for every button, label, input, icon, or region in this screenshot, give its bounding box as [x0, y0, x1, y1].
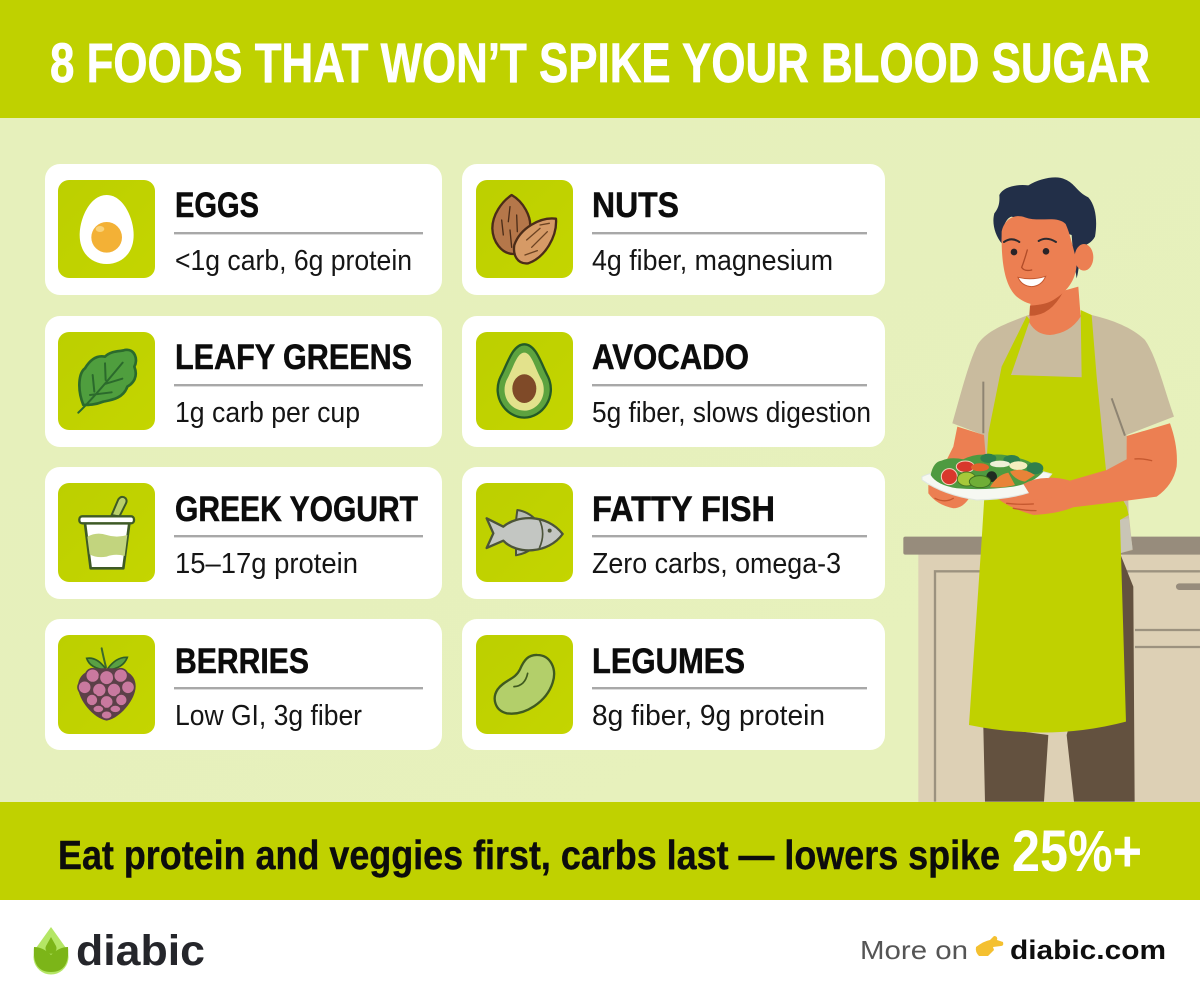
text: berries detail: Low GI, 3g fiber	[175, 700, 362, 732]
logo: drop icon	[33, 927, 68, 975]
callout band	[0, 802, 1200, 900]
heading: legumes: LEGUMES	[592, 642, 745, 681]
neck	[1029, 287, 1081, 335]
heading: eggs: EGGS	[175, 186, 259, 225]
link url: diabic.com	[1010, 935, 1166, 965]
card: leafy greens	[45, 316, 442, 447]
icon: almonds	[492, 195, 556, 263]
text: eggs detail: <1g carb, 6g protein	[175, 245, 412, 277]
card: greek yogurt	[45, 467, 442, 599]
callout figure: 25%+	[1012, 819, 1142, 884]
icon: avocado	[498, 344, 551, 418]
callout text: Eat protein and veggies first, carbs last — lowers spike	[58, 832, 1000, 878]
heading: fatty fish: FATTY FISH	[592, 490, 775, 529]
text: greek yogurt detail: 15–17g protein	[175, 548, 358, 580]
panel: background	[0, 118, 1200, 802]
right fingers over plate	[1023, 478, 1067, 500]
icon: fish	[487, 510, 563, 555]
card: nuts	[462, 164, 885, 295]
illustration: man holding salad	[922, 177, 1177, 802]
apron	[969, 310, 1129, 733]
icon: yogurt cup	[79, 497, 134, 568]
card: eggs	[45, 164, 442, 295]
heading: nuts: NUTS	[592, 186, 679, 225]
text: legumes detail: 8g fiber, 9g protein	[592, 700, 825, 732]
footer	[0, 900, 1200, 1000]
logo: wordmark: diabic	[76, 927, 205, 975]
card: fatty fish	[462, 467, 885, 599]
card: avocado	[462, 316, 885, 447]
header band	[0, 0, 1200, 118]
heading: avocado: AVOCADO	[592, 338, 749, 377]
text: fatty fish detail: Zero carbs, omega-3	[592, 548, 841, 580]
facial features	[1004, 239, 1056, 287]
link label: More on	[860, 935, 968, 965]
face	[1002, 216, 1077, 305]
illustration: kitchen counter	[903, 537, 1200, 803]
icon: leaf	[78, 350, 136, 413]
icon: pointing hand	[976, 936, 1003, 956]
icon: bean	[495, 655, 554, 714]
icon: egg	[80, 195, 134, 264]
text: avocado detail: 5g fiber, slows digestion	[592, 397, 871, 429]
heading: leafy greens: LEAFY GREENS	[175, 338, 412, 377]
heading: berries: BERRIES	[175, 642, 309, 681]
left arm	[943, 427, 986, 467]
ear	[1075, 244, 1093, 271]
hair	[993, 177, 1096, 278]
plate of salad	[922, 454, 1052, 500]
text: leafy greens detail: 1g carb per cup	[175, 397, 360, 429]
trousers	[983, 553, 1135, 802]
text: nuts detail: 4g fiber, magnesium	[592, 245, 833, 277]
card: berries	[45, 619, 442, 750]
card: legumes	[462, 619, 885, 750]
icon: raspberry	[78, 648, 136, 721]
right arm	[999, 423, 1177, 515]
heading: greek yogurt: GREEK YOGURT	[175, 490, 418, 529]
shirt	[952, 315, 1174, 553]
